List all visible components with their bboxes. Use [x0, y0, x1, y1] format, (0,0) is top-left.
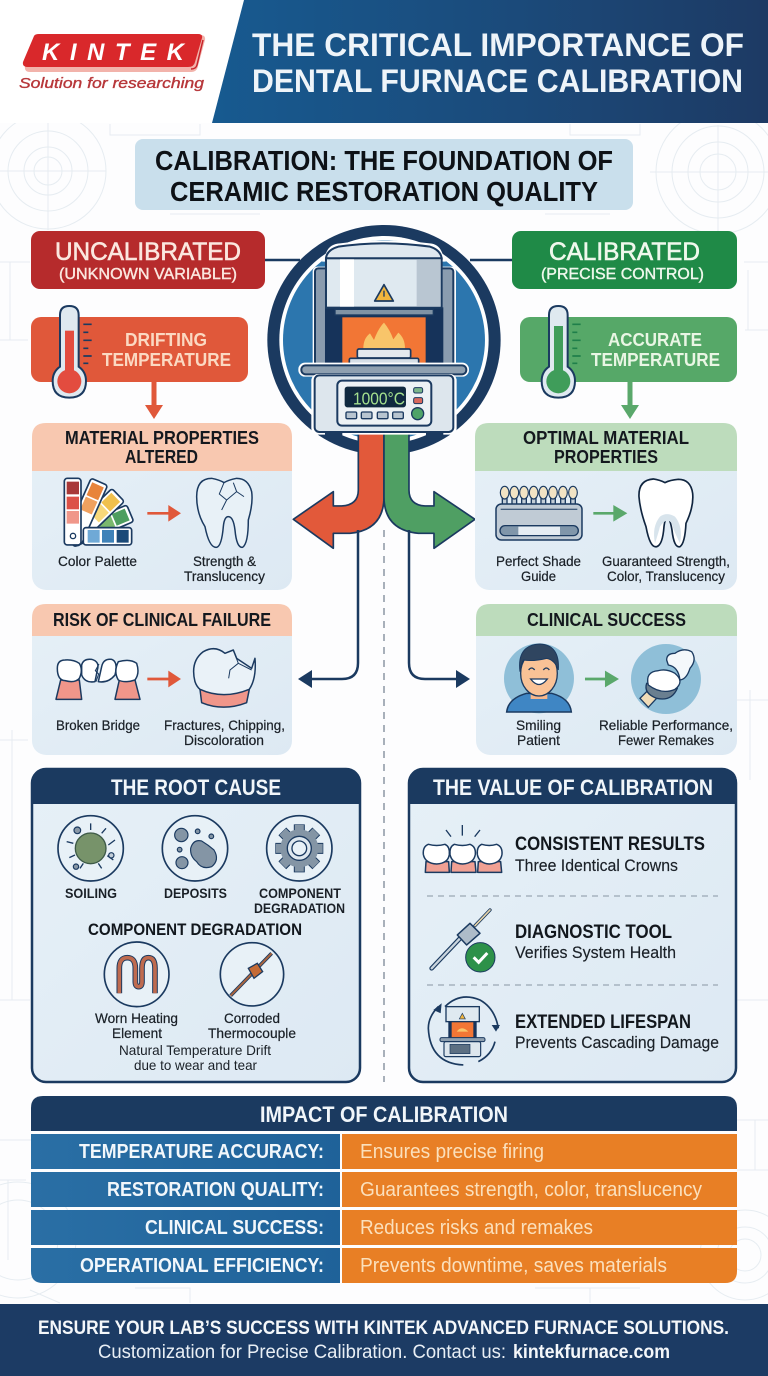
icon: color palette	[64, 478, 134, 547]
label: worn heating element: Worn Heating	[95, 1010, 178, 1026]
caption: strength and translucency: Translucency	[184, 568, 265, 584]
KINTEK logo	[19, 34, 205, 92]
KINTEK logo: Solution for researching	[19, 76, 204, 92]
KINTEK logo: KINTEK	[42, 39, 186, 66]
row: clinical success: CLINICAL SUCCESS:	[145, 1217, 324, 1239]
note: natural temperature drift: Natural Temperature Drift	[119, 1042, 271, 1058]
panel: the value of calibration	[409, 769, 737, 1082]
caption: fractures: Fractures, Chipping,	[164, 717, 285, 733]
icon: cracked tooth	[197, 478, 252, 547]
row: temperature accuracy: TEMPERATURE ACCURACY:	[79, 1141, 324, 1163]
caption: perfect shade guide: Guide	[521, 568, 556, 584]
drifting temperature callout	[31, 306, 248, 398]
text: consistent results	[515, 834, 705, 875]
row: clinical success: Reduces risks and remakes	[360, 1217, 593, 1239]
caption: reliable performance: Fewer Remakes	[618, 732, 714, 748]
subtitle banner: CALIBRATION: THE FOUNDATION OF	[155, 145, 613, 176]
dashed row separators	[427, 896, 718, 985]
connector lines from furnace to status labels	[265, 259, 512, 261]
table heading	[31, 1096, 737, 1131]
panel heading: THE VALUE OF CALIBRATION	[433, 775, 713, 800]
panel: the root cause	[32, 769, 360, 1082]
accurate temperature callout: TEMPERATURE	[591, 350, 720, 370]
panel: material properties altered	[32, 423, 292, 590]
accurate temperature callout: ACCURATE	[608, 330, 702, 350]
text: consistent results: Three Identical Crowns	[515, 857, 678, 875]
footer call to action: Customization for Precise Calibration. Contact us:	[98, 1342, 506, 1363]
arrow: bridge to crown	[147, 671, 181, 687]
panel heading	[32, 423, 292, 471]
header title: DENTAL FURNACE CALIBRATION	[252, 63, 743, 99]
furnace circle badge	[267, 225, 501, 455]
caption: perfect shade guide	[496, 553, 581, 584]
row: restoration quality: Guarantees strength, color, translucency	[360, 1179, 702, 1201]
icon: fractured crown	[194, 649, 255, 707]
caption: broken bridge: Broken Bridge	[56, 717, 140, 733]
caption: reliable performance	[599, 717, 733, 748]
icon: diagnostic tool	[432, 910, 495, 972]
caption: perfect shade guide: Perfect Shade	[496, 553, 581, 569]
caption: reliable performance: Reliable Performance,	[599, 717, 733, 733]
icon: green thermometer	[542, 306, 581, 398]
subtitle banner	[135, 139, 633, 210]
icon: healthy tooth	[639, 479, 693, 547]
footer call to action	[0, 1304, 768, 1376]
text: extended lifespan: EXTENDED LIFESPAN	[515, 1012, 691, 1033]
subheading: component degradation: COMPONENT DEGRADATION	[88, 920, 302, 939]
panel heading: CLINICAL SUCCESS	[527, 609, 686, 630]
temperature display: 1000°C	[353, 388, 405, 408]
arrow: shade guide to tooth	[593, 505, 627, 522]
label: corroded thermocouple	[208, 1010, 296, 1041]
row: temperature accuracy	[31, 1134, 737, 1169]
drifting temperature callout: DRIFTING	[125, 330, 207, 350]
arrow: path to clinical success	[409, 530, 470, 688]
furnace illustration	[298, 240, 469, 439]
row: restoration quality: RESTORATION QUALITY:	[107, 1179, 324, 1201]
row: temperature accuracy: Ensures precise firing	[360, 1141, 544, 1163]
caption: guaranteed strength: Color, Translucency	[607, 568, 725, 584]
header banner	[0, 0, 768, 123]
panel heading	[32, 769, 360, 804]
arrow: accurate temperature to optimal properties	[621, 382, 639, 419]
calibrated label: CALIBRATED	[549, 238, 700, 266]
row: restoration quality	[31, 1172, 737, 1207]
text: extended lifespan	[515, 1012, 719, 1052]
icon: component gear	[267, 816, 332, 881]
label: corroded thermocouple: Corroded	[224, 1010, 280, 1026]
icon: furnace with lifecycle arrows	[428, 997, 500, 1065]
calibrated label	[512, 231, 737, 289]
label: worn heating element: Element	[112, 1025, 162, 1041]
text: diagnostic tool: Verifies System Health	[515, 944, 676, 962]
calibrated label: (PRECISE CONTROL)	[541, 266, 704, 283]
subtitle banner: CERAMIC RESTORATION QUALITY	[170, 176, 598, 207]
panel heading: PROPERTIES	[554, 446, 658, 467]
panel heading	[475, 423, 737, 471]
arrow: drifting temperature to altered properties	[145, 382, 163, 419]
panel heading	[32, 604, 292, 636]
header left logo area	[0, 0, 245, 123]
arrow: patient to crown	[585, 671, 619, 687]
text: diagnostic tool: DIAGNOSTIC TOOL	[515, 922, 672, 943]
panel heading: OPTIMAL MATERIAL	[523, 427, 689, 448]
accurate temperature callout	[520, 306, 737, 398]
row: operational efficiency: OPERATIONAL EFFICIENCY:	[80, 1255, 324, 1277]
central dashed divider	[383, 530, 385, 1082]
drifting temperature callout: TEMPERATURE	[102, 350, 231, 370]
header title	[252, 27, 744, 99]
icon: corroded thermocouple	[220, 943, 284, 1006]
panel heading: ALTERED	[125, 446, 198, 467]
caption: guaranteed strength	[602, 553, 730, 584]
text: extended lifespan: Prevents Cascading Damage	[515, 1034, 719, 1052]
caption: smiling patient: Smiling	[516, 717, 561, 733]
icon: smiling patient	[504, 643, 574, 713]
label: component degradation: COMPONENT	[259, 885, 341, 901]
text: diagnostic tool	[515, 922, 676, 962]
caption: color palette: Color Palette	[58, 553, 137, 569]
furnace with split arrows	[267, 225, 501, 548]
icon: worn heating element	[104, 942, 169, 1007]
icon: deposits	[162, 816, 228, 881]
footer call to action: kintekfurnace.com	[513, 1342, 670, 1363]
icon: broken bridge	[56, 659, 140, 699]
label: deposits: DEPOSITS	[164, 885, 227, 901]
icon: soiling	[58, 816, 123, 881]
note: natural temperature drift: due to wear and tear	[134, 1057, 257, 1073]
panel: optimal material properties	[475, 423, 737, 590]
impact of calibration table	[31, 1096, 737, 1283]
uncalibrated label	[31, 231, 265, 289]
label: component degradation	[254, 885, 345, 916]
arrow: path to clinical failure	[298, 530, 358, 688]
icon: three identical crowns	[423, 825, 502, 872]
row: operational efficiency: Prevents downtime, saves materials	[360, 1255, 667, 1277]
caption: fractures	[164, 717, 285, 748]
label: soiling: SOILING	[65, 885, 117, 901]
caption: smiling patient	[516, 717, 561, 748]
icon: red thermometer	[53, 306, 92, 398]
caption: guaranteed strength: Guaranteed Strength,	[602, 553, 730, 569]
label: component degradation: DEGRADATION	[254, 900, 345, 916]
panel heading	[409, 769, 737, 804]
header title background	[212, 0, 768, 123]
panel: clinical success	[476, 604, 737, 755]
icon: perfect shade guide	[496, 486, 582, 540]
panel: risk of clinical failure	[32, 604, 292, 755]
caption: strength and translucency: Strength &	[193, 553, 257, 569]
label: worn heating element	[95, 1010, 178, 1041]
table heading: IMPACT OF CALIBRATION	[260, 1102, 508, 1127]
label: corroded thermocouple: Thermocouple	[208, 1025, 296, 1041]
caption: smiling patient: Patient	[517, 732, 560, 748]
arrow: calibrated path	[384, 433, 475, 548]
note: natural temperature drift	[119, 1042, 271, 1073]
uncalibrated label: UNCALIBRATED	[55, 238, 241, 266]
panel heading: RISK OF CLINICAL FAILURE	[53, 609, 271, 630]
panel heading	[476, 604, 737, 636]
row: clinical success	[31, 1210, 737, 1245]
arrow: uncalibrated path	[293, 433, 384, 548]
icon: reliable crown	[631, 644, 701, 714]
uncalibrated label: (UNKNOWN VARIABLE)	[59, 266, 237, 283]
text: consistent results: CONSISTENT RESULTS	[515, 834, 705, 855]
caption: fractures: Discoloration	[184, 732, 264, 748]
row: operational efficiency	[31, 1248, 737, 1283]
header title: THE CRITICAL IMPORTANCE OF	[252, 27, 744, 63]
panel heading: MATERIAL PROPERTIES	[65, 427, 259, 448]
panel heading: THE ROOT CAUSE	[111, 775, 281, 800]
arrow: palette to tooth	[147, 505, 181, 522]
caption: strength and translucency	[184, 553, 265, 584]
